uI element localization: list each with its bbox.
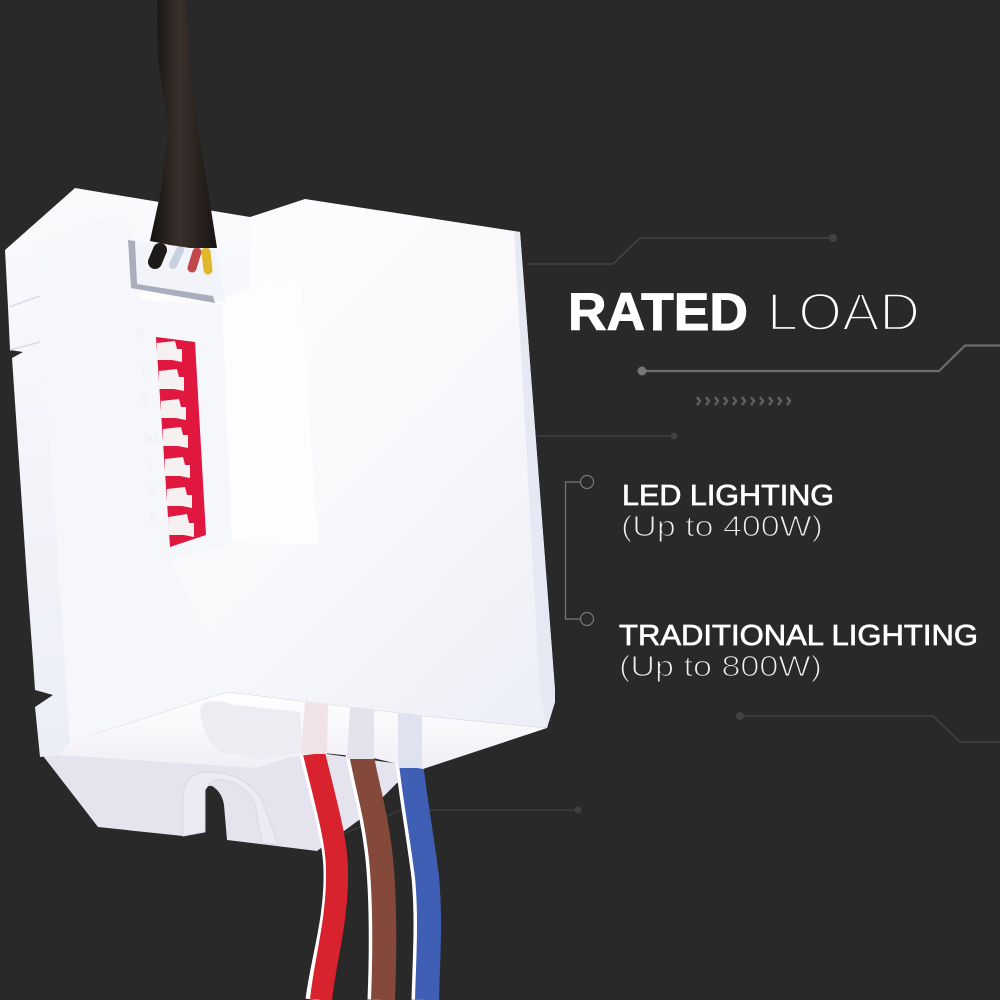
- dip switches: [157, 341, 194, 537]
- circuit trace: upper: [527, 234, 837, 264]
- blue wire: [407, 755, 429, 1000]
- left silhouette block: [5, 188, 250, 757]
- wire sleeves: [301, 702, 422, 768]
- printed scale marks: [137, 325, 157, 524]
- chevron row: [697, 397, 790, 405]
- bracket connector: [566, 476, 594, 626]
- connector shadow strip: [128, 240, 215, 303]
- LED label: LED LIGHTING: [622, 480, 834, 512]
- title bold word: RATED: [568, 283, 748, 342]
- brown wire: [357, 748, 384, 1000]
- circuit trace: lower right: [736, 712, 1000, 742]
- printed scale marks: 5: [149, 509, 156, 524]
- underside: [58, 692, 547, 769]
- traditional label: TRADITIONAL LIGHTING: [619, 620, 978, 652]
- spec: traditional lighting: [619, 620, 978, 683]
- underside moulding: [200, 701, 303, 760]
- recessed panel: [222, 280, 318, 545]
- red wire: [309, 745, 337, 1000]
- printed scale marks: 7: [140, 364, 147, 379]
- printed scale marks: 3: [147, 481, 154, 496]
- printed scale marks: 8: [137, 325, 144, 340]
- traditional value: (Up to 800W): [619, 651, 822, 683]
- title light word: LOAD: [767, 283, 920, 342]
- dip switch base: [156, 337, 206, 547]
- right side shading: [514, 231, 555, 728]
- printed scale marks: 30: [143, 431, 157, 446]
- mounting bracket: [40, 735, 423, 851]
- circuit trace: middle: [537, 432, 678, 440]
- LED value: (Up to 400W): [621, 511, 823, 543]
- circuit trace: bottom: [345, 806, 582, 833]
- connector recess: [128, 240, 226, 302]
- printed scale marks: 1: [146, 458, 153, 473]
- product: sensor module: [5, 0, 555, 1000]
- right block face: [38, 199, 555, 742]
- spec: LED lighting: [621, 480, 834, 543]
- front block face: [38, 215, 232, 742]
- left notch line: [9, 296, 40, 350]
- black cable: [150, 0, 217, 248]
- bracket clip detail: [183, 772, 278, 845]
- circuit trace: under title: [638, 346, 1000, 376]
- connector strands: [155, 250, 208, 270]
- title: [568, 283, 920, 342]
- printed scale marks: 5: [141, 393, 148, 408]
